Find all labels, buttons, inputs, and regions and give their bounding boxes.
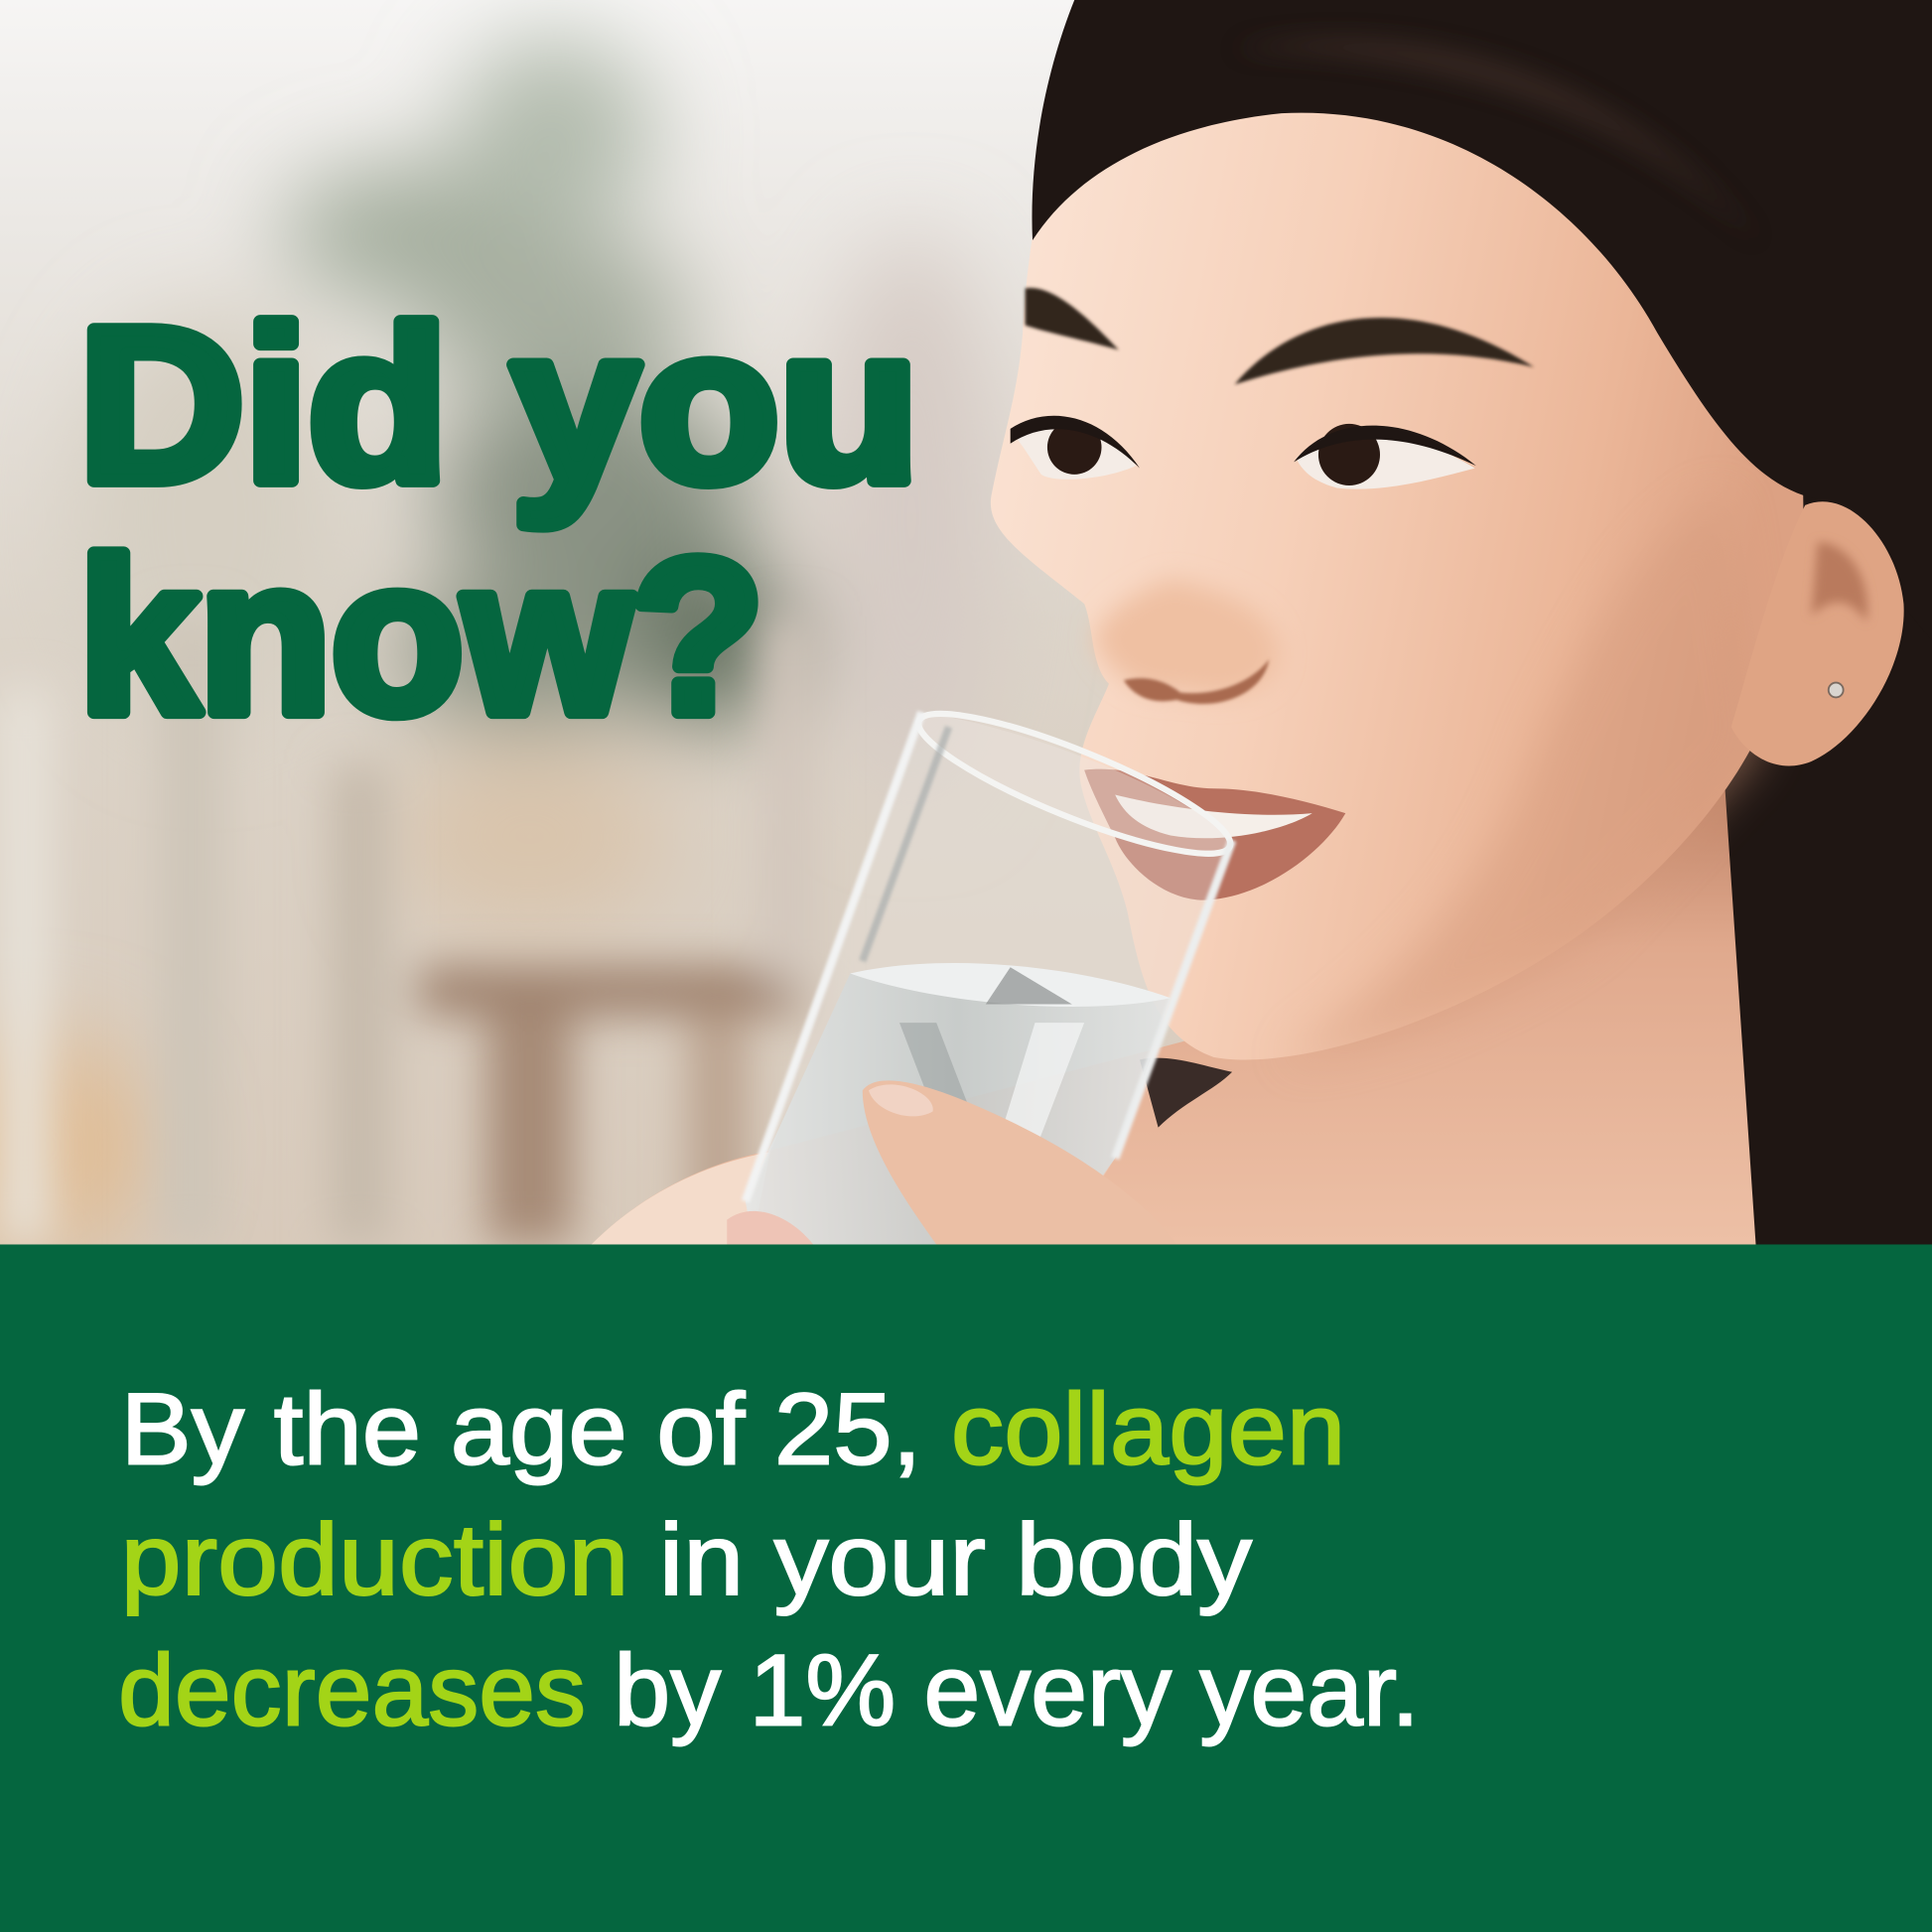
hair wisps by jaw xyxy=(1140,1058,1232,1128)
hair xyxy=(1032,0,1932,640)
text line 1: By the age of 25, collagen xyxy=(121,1372,1345,1485)
panel text: collagen fact xyxy=(118,1372,1420,1746)
ear xyxy=(1731,501,1904,765)
green text panel xyxy=(0,1244,1932,1932)
text line 3: decreases by 1% every year. xyxy=(118,1633,1420,1746)
photo: woman drinking water xyxy=(0,0,1932,1257)
hair sheen xyxy=(1232,39,1762,246)
hair behind neck xyxy=(1725,494,1932,1245)
nose xyxy=(1094,579,1279,696)
neck and shoulder xyxy=(592,788,1756,1244)
shoulder highlight xyxy=(592,1152,770,1244)
eyebrows xyxy=(1026,288,1534,384)
eyes xyxy=(1011,416,1476,489)
glass of water xyxy=(746,690,1242,1244)
earring xyxy=(1829,683,1844,697)
heading line 1: Did you xyxy=(78,282,919,527)
face xyxy=(991,44,1803,1059)
blurred interior background xyxy=(0,0,1232,1257)
heading: did you know xyxy=(78,282,919,759)
text line 2: production in your body xyxy=(121,1503,1252,1616)
heading line 2: know? xyxy=(78,513,763,759)
cheek and jaw shading xyxy=(1322,571,1779,1048)
lips and teeth xyxy=(1084,769,1345,900)
hand and finger xyxy=(727,1080,1176,1244)
